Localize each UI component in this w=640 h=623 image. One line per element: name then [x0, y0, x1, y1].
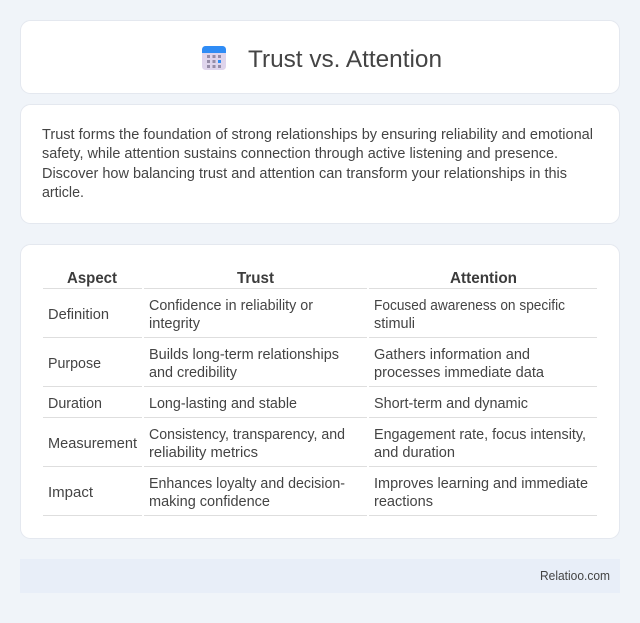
row: impact: Impact: [48, 485, 93, 501]
row: duration: Duration: [48, 396, 102, 412]
intro paragraph: Trust forms the foundation of strong relationships by ensuring reliability and emotional: [42, 127, 593, 143]
title: Trust vs. Attention: [248, 46, 442, 73]
row: impact: [48, 476, 588, 510]
row: measurement: and duration: [374, 445, 455, 461]
table header: [67, 270, 517, 287]
row: measurement: [48, 427, 586, 461]
row: purpose: Gathers information and: [374, 347, 530, 363]
table header: Trust: [237, 270, 275, 287]
panel: introduction: [20, 104, 620, 224]
row: measurement: Consistency, transparency, and: [149, 427, 345, 443]
row: purpose: processes immediate data: [374, 365, 545, 381]
row: definition: Focused awareness on specific: [374, 298, 565, 314]
row: purpose: and credibility: [149, 365, 238, 381]
row: duration: [48, 396, 528, 412]
footer: Relatioo.com: [540, 569, 610, 583]
panel: title card: [20, 20, 620, 94]
row: measurement: Measurement: [48, 436, 137, 452]
row: purpose: Purpose: [48, 356, 101, 372]
row: impact: making confidence: [149, 494, 270, 510]
row: definition: [48, 298, 565, 332]
panel: comparison table: [20, 244, 620, 538]
row: definition: integrity: [149, 316, 201, 332]
row: duration: Long-lasting and stable: [149, 396, 297, 412]
intro paragraph: [42, 127, 593, 201]
table header: Attention: [450, 270, 517, 287]
row: definition: Confidence in reliability or: [149, 298, 313, 314]
row: impact: Enhances loyalty and decision-: [149, 476, 345, 492]
row: definition: stimuli: [374, 316, 415, 332]
row: impact: Improves learning and immediate: [374, 476, 588, 492]
table header: Aspect: [67, 270, 118, 287]
row: measurement: reliability metrics: [149, 445, 258, 461]
row: impact: reactions: [374, 494, 433, 510]
row: measurement: Engagement rate, focus intensity,: [374, 427, 586, 443]
row: duration: Short-term and dynamic: [374, 396, 528, 412]
row: definition: Definition: [48, 307, 109, 323]
intro paragraph: article.: [42, 185, 84, 201]
footer: [20, 559, 620, 593]
intro paragraph: Discover how balancing trust and attention can transform your relationships in this: [42, 166, 567, 182]
row: purpose: Builds long-term relationships: [149, 347, 339, 363]
row: purpose: [48, 347, 545, 381]
intro paragraph: safety, while attention sustains connection through active listening and presence.: [42, 146, 558, 162]
icon: calendar: [202, 46, 226, 70]
